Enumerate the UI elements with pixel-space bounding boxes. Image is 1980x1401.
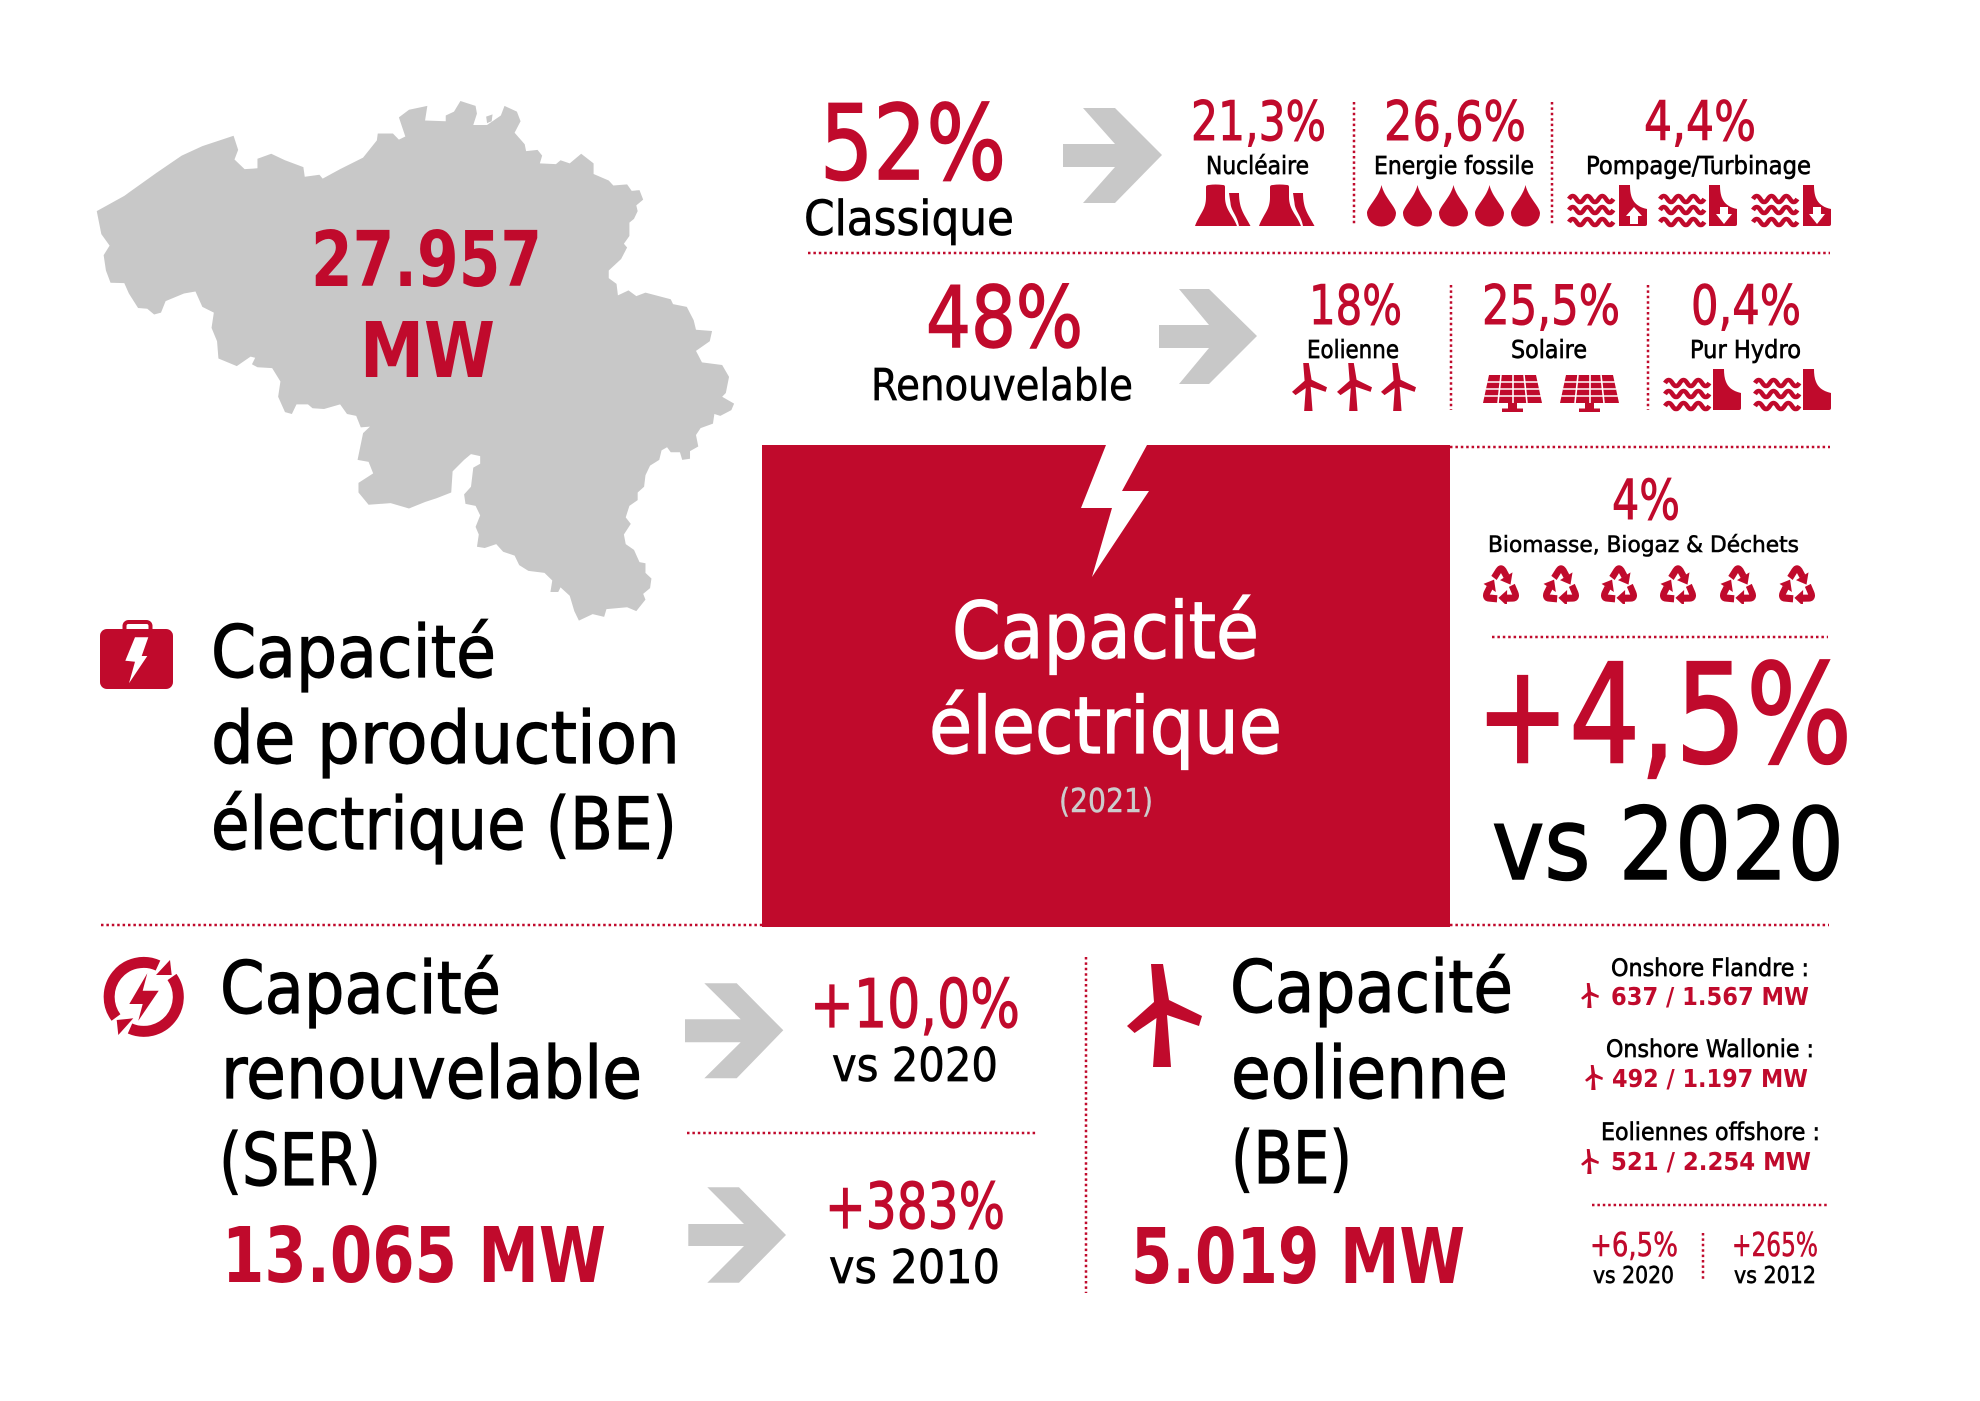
- stat: onshore Wallonia: Onshore Wallonie :: [1606, 1035, 1814, 1063]
- pumped storage label: Pompage/Turbinage: [1586, 151, 1811, 180]
- icon: large wind turbine: [1127, 964, 1202, 1067]
- stat: offshore wind: Eoliennes offshore :: [1601, 1118, 1820, 1146]
- callout: growth vs 2020: [1476, 636, 1852, 903]
- icon: wind turbines: [1292, 363, 1416, 411]
- icon: renewable cycle with bolt: [109, 960, 178, 1035]
- wind capacity value: 5.019 MW: [1131, 1213, 1465, 1302]
- item: pumped storage: [1569, 90, 1831, 226]
- item: wind: [1292, 274, 1416, 411]
- growth value: +4,5%: [1476, 636, 1852, 795]
- stat: onshore Flanders: Onshore Flandre :: [1611, 954, 1809, 982]
- item: solar: [1482, 274, 1620, 412]
- icon: oil drops: [1367, 185, 1540, 226]
- heading text: (SER): [219, 1118, 381, 1202]
- icon: water and dams: [1665, 369, 1831, 410]
- heading: production capacity: [100, 610, 680, 866]
- growth vs 2020: [810, 965, 1020, 1092]
- item: fossil energy: [1367, 90, 1540, 226]
- panel: electric capacity: [762, 445, 1450, 927]
- icon: briefcase with bolt: [100, 622, 173, 689]
- growth vs 2020: +10,0%: [810, 965, 1020, 1043]
- heading text: Capacité: [1230, 945, 1513, 1029]
- item: biomass: [1481, 468, 1815, 608]
- renewable label: Renouvelable: [871, 360, 1133, 411]
- solar percentage: 25,5%: [1482, 274, 1620, 337]
- arrow: [1159, 289, 1257, 384]
- renewable capacity value: 13.065 MW: [222, 1212, 606, 1301]
- wind label: Eolienne: [1307, 335, 1399, 364]
- stat: offshore wind: [1581, 1118, 1820, 1176]
- growth vs 2010: +383%: [825, 1170, 1005, 1243]
- pumped storage percentage: 4,4%: [1644, 90, 1756, 153]
- stat: growth vs 2012: [1732, 1225, 1818, 1289]
- nuclear percentage: 21,3%: [1191, 90, 1326, 153]
- classic percentage: 52%: [820, 84, 1006, 204]
- panel background: [762, 445, 1450, 927]
- heading text: renouvelable: [221, 1031, 642, 1115]
- growth vs 2010: vs 2010: [829, 1240, 1000, 1294]
- renewable percentage: 48%: [926, 269, 1083, 368]
- stat: growth vs 2020: +6,5%: [1590, 1225, 1678, 1264]
- stat: growth vs 2012: +265%: [1732, 1225, 1818, 1264]
- heading text: de production: [211, 696, 680, 780]
- classic label: Classique: [804, 191, 1014, 247]
- hydro label: Pur Hydro: [1690, 335, 1801, 364]
- icon: solar panels: [1483, 375, 1619, 412]
- total capacity unit: MW: [360, 307, 495, 396]
- icon: recycling symbols: [1481, 569, 1815, 608]
- item: nuclear: [1191, 90, 1326, 226]
- stat: growth vs 2020: [1590, 1225, 1678, 1289]
- stat: growth vs 2012: vs 2012: [1734, 1263, 1816, 1289]
- item: pure hydro: [1665, 274, 1831, 410]
- stat: growth vs 2020: vs 2020: [1593, 1263, 1674, 1289]
- panel title line 1: Capacité: [952, 587, 1259, 677]
- heading text: électrique (BE): [211, 782, 677, 866]
- heading text: Capacité: [220, 946, 501, 1030]
- section: wind capacity: [1127, 945, 1820, 1302]
- nuclear label: Nucléaire: [1206, 151, 1309, 180]
- section: renewable capacity: [109, 946, 1020, 1301]
- fossil percentage: 26,6%: [1384, 90, 1526, 153]
- map: Belgium silhouette: [97, 101, 734, 621]
- heading text: Capacité: [211, 610, 496, 694]
- row: classic share 52%: [804, 84, 1162, 247]
- row: renewable share 48%: [871, 269, 1257, 411]
- icon: cooling towers: [1195, 184, 1314, 226]
- icon: water and dams with arrows: [1569, 185, 1831, 226]
- year: (2021): [1059, 781, 1153, 820]
- solar label: Solaire: [1511, 335, 1587, 364]
- arrow: [685, 983, 783, 1078]
- wind percentage: 18%: [1309, 274, 1402, 337]
- icon: lightning bolt: [1081, 445, 1149, 577]
- growth vs 2020: vs 2020: [832, 1038, 998, 1092]
- heading text: (BE): [1231, 1116, 1352, 1200]
- stat: offshore wind: 521 / 2.254 MW: [1611, 1147, 1811, 1176]
- panel title line 2: électrique: [929, 682, 1282, 772]
- heading text: eolienne: [1231, 1031, 1508, 1115]
- growth comparison: vs 2020: [1492, 786, 1844, 903]
- growth vs 2010: [825, 1170, 1005, 1294]
- biomass percentage: 4%: [1612, 468, 1680, 532]
- stat: onshore Wallonia: 492 / 1.197 MW: [1612, 1064, 1808, 1093]
- stat: onshore Wallonia: [1585, 1035, 1814, 1093]
- fossil label: Energie fossile: [1374, 151, 1534, 180]
- arrow: [688, 1187, 786, 1283]
- stat: onshore Flanders: 637 / 1.567 MW: [1611, 982, 1809, 1011]
- biomass label: Biomasse, Biogaz & Déchets: [1488, 533, 1799, 558]
- arrow: [1063, 108, 1162, 203]
- map of Belgium with total capacity: [97, 101, 734, 621]
- stat: onshore Flanders: [1581, 954, 1809, 1011]
- hydro percentage: 0,4%: [1691, 274, 1801, 337]
- total capacity value: 27.957: [311, 216, 542, 305]
